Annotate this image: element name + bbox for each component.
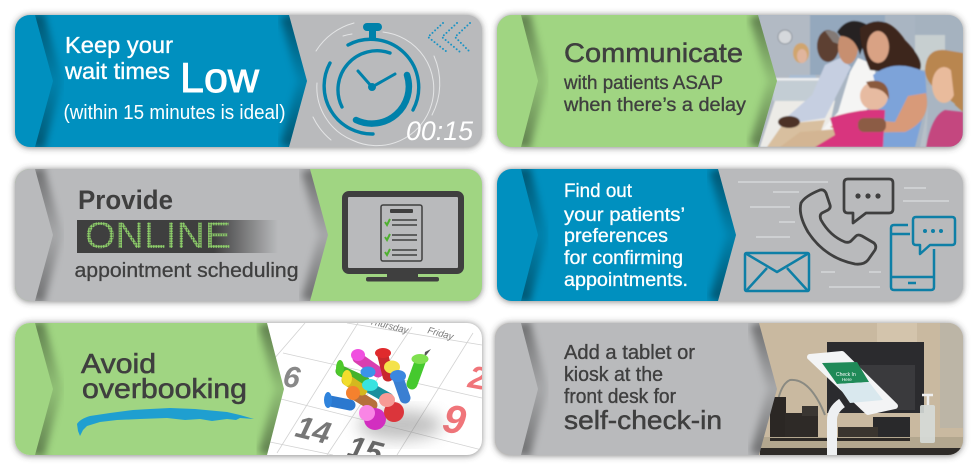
photo: calendar with push pins: 15 — [344, 429, 387, 470]
photo: calendar with push pins: 6 — [281, 360, 302, 395]
heading: avoid overbooking: overbooking — [82, 373, 247, 404]
photo: calendar with push pins: Thursday — [368, 316, 411, 337]
panel: self check-in — [495, 323, 963, 455]
text: add a tablet or kiosk: Add a tablet or — [564, 342, 695, 364]
timer: 00:15: 00:15 — [406, 116, 474, 146]
panel: patient preferences — [497, 169, 963, 301]
icon: dotted chevrons — [428, 23, 470, 52]
online sign: ONLINE — [85, 215, 231, 256]
speed lines — [738, 182, 949, 287]
text: within 15 minutes: (within 15 minutes is ideal) — [64, 102, 286, 124]
icon: envelope — [745, 253, 809, 291]
icon: dark speech bubble — [844, 179, 893, 223]
panel: keep wait times low — [0, 15, 482, 147]
icon: smartphone with bubble — [891, 217, 955, 290]
photo: calendar with push pins: 14 — [292, 409, 334, 451]
photo: calendar with push pins: 2 — [465, 358, 490, 397]
heading: keep your wait times low: wait times — [64, 58, 170, 84]
heading: self-check-in: self-check-in — [564, 405, 722, 435]
brush stroke underline — [77, 408, 254, 436]
text: add a tablet or kiosk: front desk for — [564, 386, 676, 408]
photo: check-in kiosk at front desk: Check In — [836, 372, 856, 378]
heading: keep your wait times low: Keep your — [65, 32, 173, 58]
icon: telephone — [800, 190, 876, 264]
text: find out preferences: appointments. — [564, 269, 688, 291]
photo: calendar with push pins: Friday — [426, 325, 456, 343]
panel: online scheduling — [0, 169, 482, 301]
text: add a tablet or kiosk: kiosk at the — [564, 364, 663, 386]
icon: stopwatch — [313, 23, 440, 146]
heading: provide: Provide — [78, 185, 173, 215]
panel: avoid overbooking — [15, 323, 482, 455]
online sign — [77, 220, 274, 253]
photo: waiting room — [760, 15, 963, 147]
photo: check-in kiosk at front desk: Here — [842, 377, 852, 382]
text: find out preferences — [564, 180, 688, 291]
heading: keep your wait times low — [64, 36, 260, 93]
heading: avoid overbooking: Avoid — [81, 348, 156, 379]
text: appointment scheduling: appointment scheduling — [74, 259, 298, 282]
heading: keep your wait times low: Low — [180, 54, 260, 101]
text: find out preferences: preferences — [564, 225, 668, 247]
photo: calendar with push pins: 9 — [439, 397, 470, 444]
text: find out preferences: for confirming — [564, 247, 683, 269]
heading: avoid overbooking — [81, 348, 247, 404]
panel: communicate — [497, 15, 963, 147]
icon: monitor with checklist — [345, 194, 461, 282]
photo: check-in kiosk at front desk — [760, 323, 963, 455]
photo: calendar with push pins — [270, 323, 482, 455]
text: find out preferences: your patients’ — [564, 204, 685, 226]
heading: communicate: Communicate — [564, 38, 743, 68]
text: with patients ASAP: with patients ASAP — [563, 72, 723, 94]
text: find out preferences: Find out — [564, 180, 633, 202]
text: with patients ASAP — [563, 72, 746, 116]
text: add a tablet or kiosk — [564, 342, 695, 408]
text: with patients ASAP: when there’s a delay — [563, 94, 746, 116]
